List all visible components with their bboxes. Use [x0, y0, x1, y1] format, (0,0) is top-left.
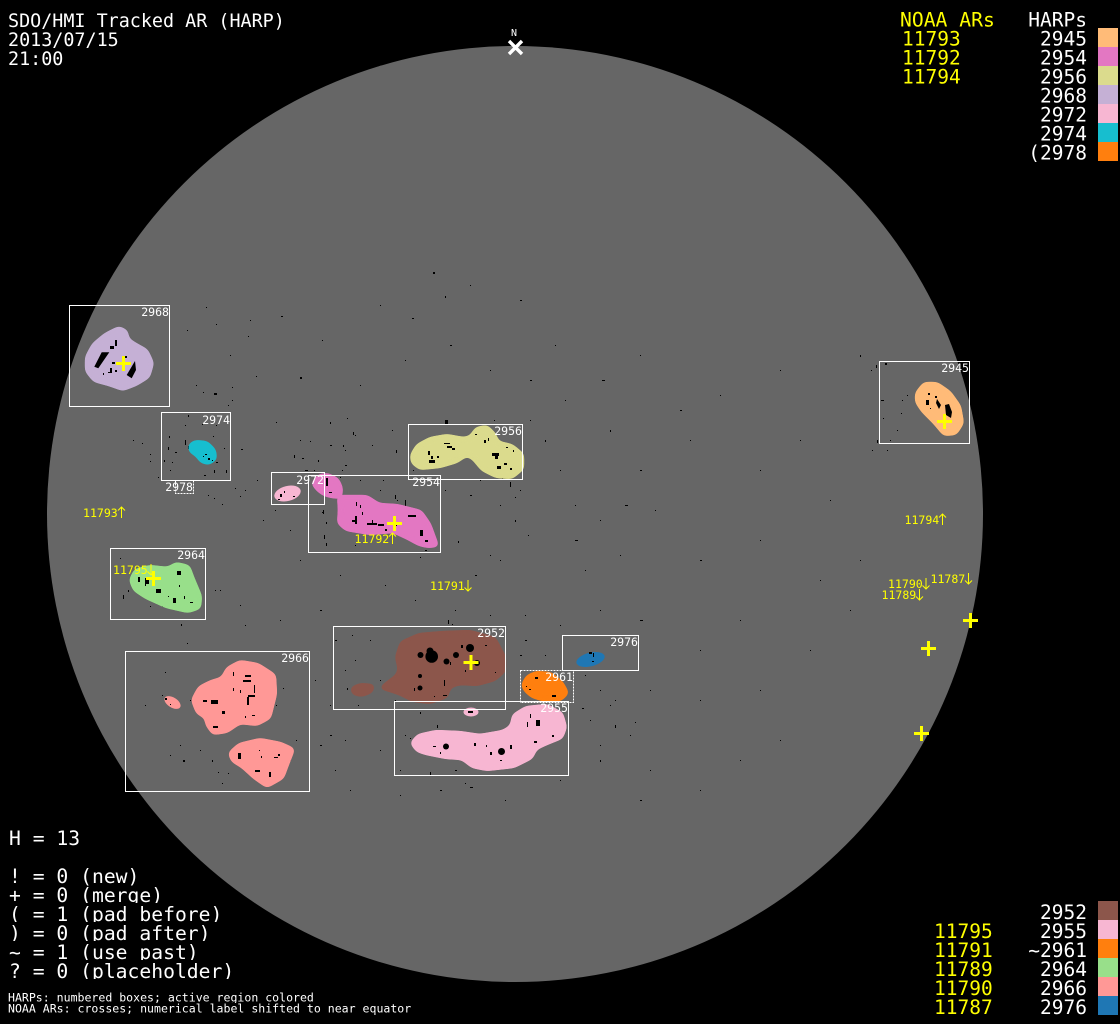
- box: HARP 2974: [162, 412, 230, 480]
- legend: southern HARP numbers: 2952: [1040, 901, 1087, 924]
- flag counts list: ~ = 1 (use past): [9, 941, 199, 964]
- legend header and northern NOAA list: 11793: [902, 28, 961, 50]
- legend: northern HARP numbers: 2954: [1040, 46, 1087, 70]
- flag counts list: ! = 0 (new): [9, 865, 139, 888]
- box: HARP 2972: [272, 472, 324, 504]
- active region blobs: HARP 2952: [351, 631, 505, 703]
- HARP box number labels: 2964: [177, 548, 205, 562]
- NOAA AR labels shifted to equator: [83, 506, 965, 602]
- NOAA AR labels shifted to equator: 11794: [904, 513, 939, 527]
- scattered magnetic specks: [120, 272, 908, 801]
- HARP box number labels: 2976: [610, 635, 638, 649]
- flag counts list: [0, 865, 240, 984]
- legend: northern HARP numbers: 2972: [1040, 104, 1087, 126]
- NOAA AR crosses: [116, 356, 978, 741]
- NOAA AR labels shifted to equator: 11787: [930, 572, 965, 586]
- legend header and northern NOAA list: 11792: [902, 46, 961, 70]
- NOAA AR labels shifted to equator: 11789: [882, 588, 916, 602]
- box: HARP 2961: [520, 670, 574, 702]
- box: HARP 2952: [334, 626, 506, 710]
- legend: southern HARP numbers: 2976: [1040, 996, 1087, 1019]
- legend: southern NOAA list: 11791: [934, 939, 993, 962]
- legend header and northern NOAA list: NOAA ARs: [900, 9, 995, 32]
- HARP box number labels: 2972: [296, 473, 324, 487]
- NOAA AR labels shifted to equator: 11793: [83, 506, 118, 520]
- HARP box number labels: 2974: [202, 413, 230, 427]
- active region blob: HARP 2945: [916, 383, 963, 435]
- active region blob: HARP 2961: [522, 672, 568, 701]
- box: HARP 2978: [176, 480, 194, 494]
- HARP box number labels: 2966: [281, 651, 309, 665]
- legend: southern NOAA list: [934, 920, 993, 1019]
- legend: southern HARP numbers: [1028, 901, 1087, 1019]
- active region blobs: HARP 2966: [162, 661, 294, 787]
- legend: northern color swatches: [1098, 28, 1118, 161]
- H count: H = 13: [9, 827, 80, 850]
- legend: southern color swatches: [1098, 901, 1118, 1015]
- legend: northern HARP numbers: [1028, 9, 1087, 165]
- legend: northern HARP numbers: 2956: [1040, 66, 1087, 88]
- legend: northern HARP numbers: 2968: [1040, 84, 1087, 108]
- legend: southern NOAA list: 11790: [934, 977, 993, 1000]
- flag counts list: ? = 0 (placeholder): [9, 960, 234, 983]
- box: HARP 2976: [562, 636, 638, 670]
- footnote: [0, 990, 420, 1016]
- box: HARP 2966: [126, 652, 310, 792]
- legend: southern NOAA list: 11789: [934, 958, 993, 981]
- legend: northern HARP numbers: HARPs: [1028, 9, 1087, 32]
- NOAA AR hemisphere arrows: [118, 507, 972, 600]
- legend: southern HARP numbers: 2966: [1040, 977, 1087, 1000]
- HARP box number labels: 2961: [545, 670, 573, 684]
- active region blob: HARP 2974: [189, 441, 216, 464]
- NOAA AR labels shifted to equator: 11791: [430, 579, 465, 593]
- NOAA AR labels shifted to equator: 11790: [888, 577, 923, 591]
- legend: northern HARP numbers: 2945: [1040, 28, 1087, 50]
- HARP box number labels: 2952: [477, 626, 505, 640]
- active region blobs: HARP 2954: [312, 474, 438, 547]
- legend header and northern NOAA list: 11794: [902, 66, 961, 88]
- solar disk: [47, 46, 983, 982]
- NOAA AR labels shifted to equator: 11795: [113, 563, 148, 577]
- footnote: HARPs: numbered boxes; active region colored: [8, 990, 314, 1004]
- box: HARP 2956: [408, 424, 522, 480]
- title block: SDO/HMI Tracked AR (HARP): [8, 11, 285, 32]
- box: HARP 2955: [394, 702, 568, 776]
- north pole marker: N: [511, 28, 517, 39]
- legend: southern HARP numbers: 2964: [1040, 958, 1087, 981]
- flag counts list: ( = 1 (pad before): [9, 903, 222, 926]
- title block: [8, 11, 285, 70]
- HARP box number labels: 2945: [941, 361, 969, 375]
- HARP boxes: [70, 306, 970, 792]
- legend header and northern NOAA list: [900, 9, 995, 89]
- HARP box number labels: 2978: [165, 480, 193, 494]
- title block: 21:00: [8, 49, 63, 70]
- active region blob: HARP 2976: [575, 649, 606, 670]
- NOAA AR labels shifted to equator: 11792: [354, 532, 389, 546]
- box: HARP 2945: [880, 362, 970, 444]
- active region blob: HARP 2968: [86, 327, 153, 390]
- flag counts list: + = 0 (merge): [9, 884, 163, 907]
- footnote: NOAA ARs: crosses; numerical label shifted to near equator: [8, 1002, 411, 1016]
- HARP box number labels: 2956: [494, 424, 522, 438]
- north pole marker: [509, 28, 522, 54]
- HARP box number labels: 2968: [141, 305, 169, 319]
- active region blob: HARP 2956: [411, 426, 523, 478]
- legend: southern HARP numbers: ~2961: [1028, 939, 1087, 962]
- box: HARP 2954: [308, 476, 440, 552]
- HARP box number labels: 2954: [412, 475, 440, 489]
- title block: 2013/07/15: [8, 30, 119, 51]
- active region blob: HARP 2972: [273, 483, 302, 504]
- legend: southern NOAA list: 11795: [934, 920, 993, 943]
- box: HARP 2964: [110, 548, 206, 620]
- legend: southern HARP numbers: 2955: [1040, 920, 1087, 943]
- flag counts list: ) = 0 (pad after): [9, 922, 210, 945]
- legend: northern HARP numbers: (2978: [1028, 142, 1087, 164]
- legend: southern NOAA list: 11787: [934, 996, 993, 1019]
- active region blob: HARP 2964: [130, 563, 201, 612]
- box: HARP 2968: [70, 306, 170, 406]
- legend: northern HARP numbers: 2974: [1040, 122, 1087, 146]
- active region blobs: HARP 2955: [411, 705, 566, 770]
- HARP box number labels: 2955: [540, 701, 568, 715]
- HARP box number labels: [141, 305, 969, 715]
